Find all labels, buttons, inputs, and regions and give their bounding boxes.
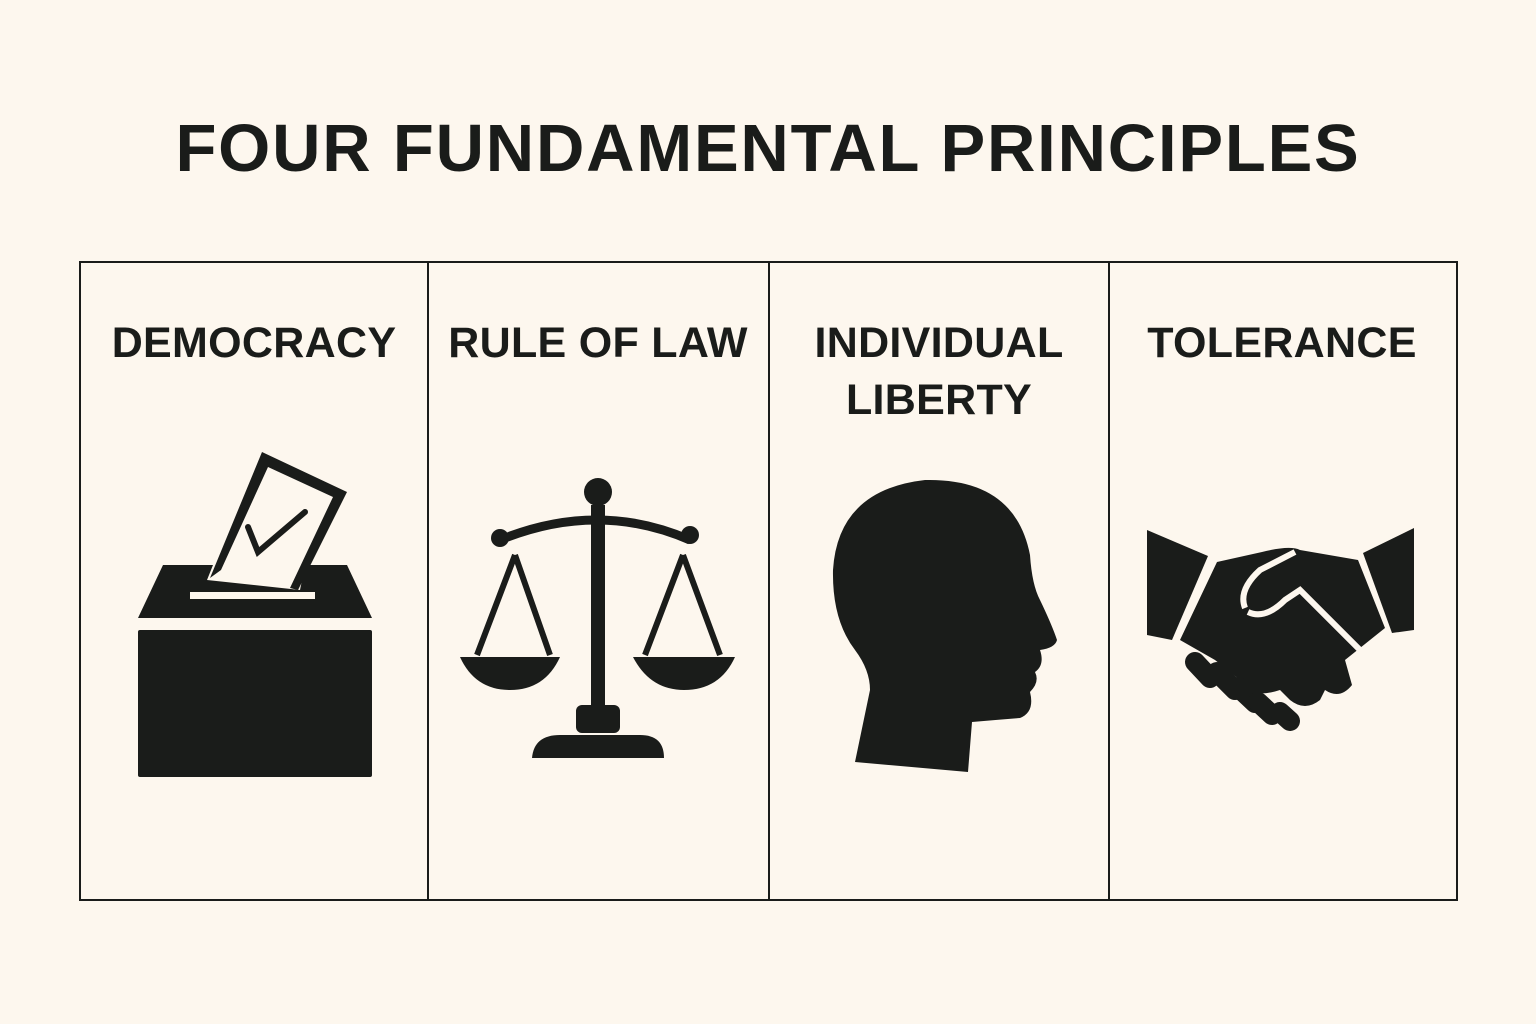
icon: handshake (1147, 528, 1414, 721)
panel grid (79, 261, 1458, 901)
heading: individual liberty (814, 319, 1064, 424)
heading: individual liberty: INDIVIDUAL (814, 319, 1064, 367)
title: FOUR FUNDAMENTAL PRINCIPLES (175, 111, 1361, 186)
icon: scales (460, 478, 735, 758)
heading: rule of law: RULE OF LAW (448, 319, 748, 367)
icon: ballot box (138, 452, 372, 777)
icon: head (833, 480, 1057, 772)
heading: individual liberty: LIBERTY (846, 376, 1032, 424)
heading: tolerance: TOLERANCE (1147, 319, 1417, 367)
heading: democracy: DEMOCRACY (112, 319, 396, 367)
